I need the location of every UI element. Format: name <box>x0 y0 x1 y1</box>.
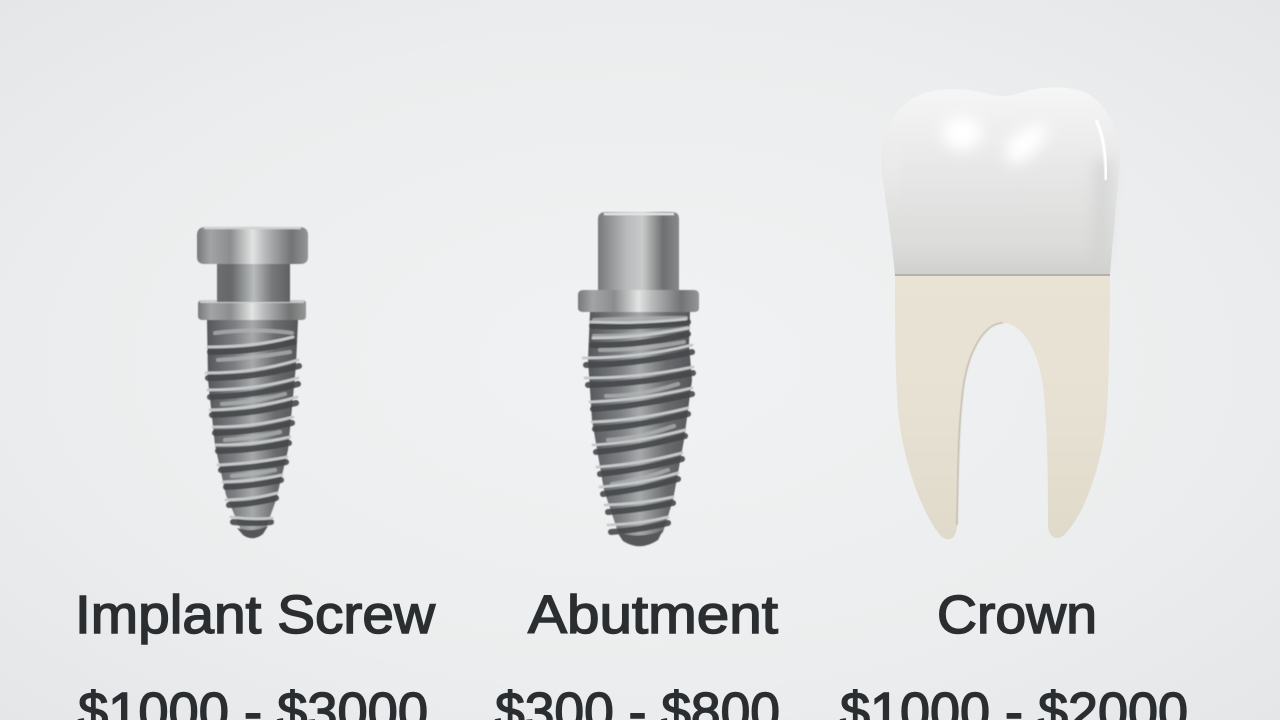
head <box>197 227 308 264</box>
icon: implant screw <box>197 227 308 538</box>
icon: crown tooth <box>881 87 1120 539</box>
label: abutment: Abutment <box>528 585 778 645</box>
collar <box>578 290 699 312</box>
crown <box>881 87 1120 276</box>
root <box>895 273 1110 539</box>
collar <box>198 300 306 320</box>
label: crown: Crown <box>937 585 1097 645</box>
neck <box>217 264 290 302</box>
abutment top cylinder <box>598 212 679 292</box>
icon: abutment <box>578 212 699 546</box>
label: implant screw: Implant Screw <box>75 585 436 645</box>
crown highlights <box>888 116 1112 262</box>
